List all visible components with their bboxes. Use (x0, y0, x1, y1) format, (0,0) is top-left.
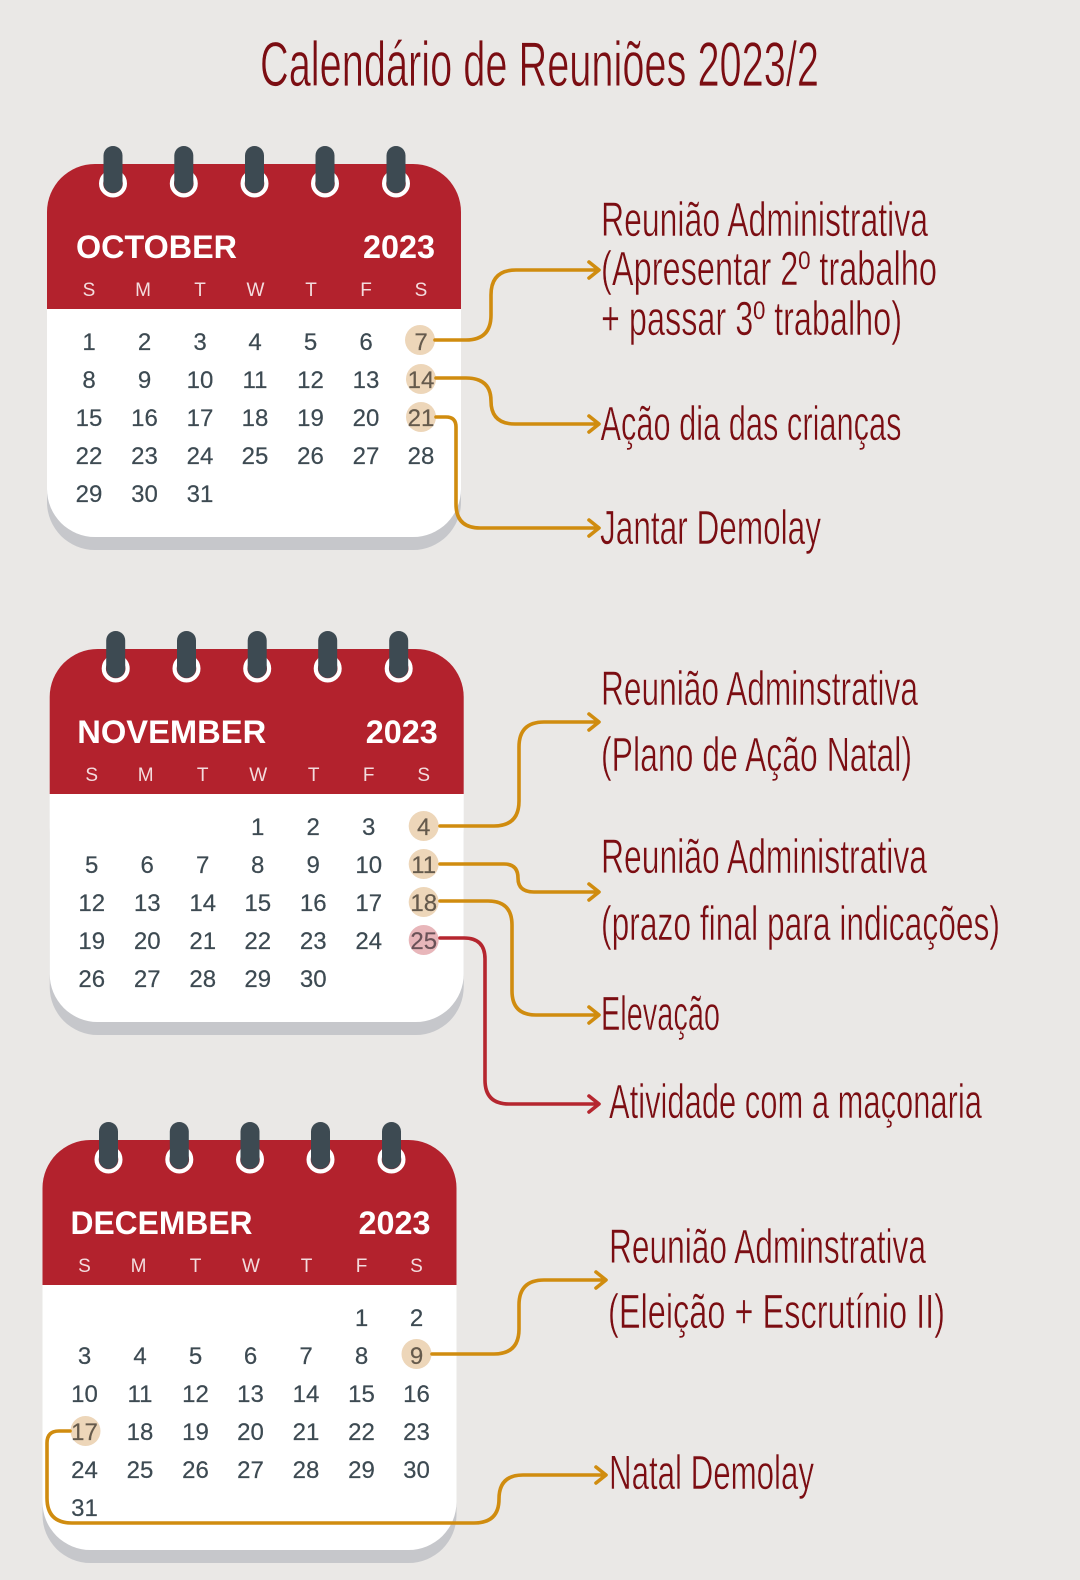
panel: october calendar: 24 (187, 443, 213, 470)
panel: november calendar: 12 (78, 890, 105, 917)
text: november 4 event: (Plano de Ação Natal) (601, 729, 912, 782)
panel: december calendar: 31 (71, 1495, 98, 1522)
panel: december calendar: T (301, 1256, 313, 1277)
text: november 11 event: Reunião Administrativa (601, 831, 927, 884)
panel: december calendar: 11 (128, 1381, 152, 1408)
panel: november calendar: S (85, 765, 98, 786)
panel: december calendar: 4 (133, 1343, 147, 1370)
panel: december calendar: T (190, 1256, 202, 1277)
text: october 7 event: + passar 3º trabalho) (601, 293, 902, 346)
panel: october calendar: 4 (248, 329, 262, 356)
panel: december calendar: 16 (403, 1381, 430, 1408)
panel: october calendar: OCTOBER (76, 229, 237, 265)
arrow: october 14 (436, 378, 599, 432)
panel: december calendar: S (410, 1256, 423, 1277)
panel: november calendar: 2 (307, 814, 320, 841)
panel: october calendar: 29 (76, 481, 102, 508)
panel: december calendar: 5 (189, 1343, 202, 1370)
panel: november calendar: 22 (244, 928, 271, 955)
panel: october calendar: 22 (76, 443, 102, 470)
panel: december calendar: 15 (348, 1381, 375, 1408)
panel: october calendar: 6 (359, 329, 373, 356)
panel: november calendar: 4 (417, 814, 430, 841)
panel: october calendar: 11 (243, 367, 267, 394)
arrow: december 17 (47, 1431, 606, 1523)
text: november 18 event: Elevação (601, 988, 720, 1041)
panel: november calendar: 29 (244, 966, 271, 993)
panel: october calendar: 26 (297, 443, 324, 470)
panel: december calendar: 14 (293, 1381, 319, 1408)
panel: november calendar: T (308, 765, 320, 786)
panel: october calendar: W (247, 280, 265, 301)
panel: october calendar: 3 (193, 329, 207, 356)
panel: november calendar: 26 (78, 966, 105, 993)
panel: october calendar: 27 (353, 443, 379, 470)
panel: december calendar: 27 (237, 1457, 264, 1484)
panel: december calendar: 6 (244, 1343, 257, 1370)
panel: october calendar: 18 (242, 405, 268, 432)
panel: november calendar (50, 631, 464, 1035)
arrow: november 25 (440, 938, 599, 1112)
panel: october calendar: 25 (242, 443, 268, 470)
text: november 4 event: Reunião Adminstrativa (601, 663, 918, 716)
panel: october calendar: 7 (414, 329, 428, 356)
panel: november calendar: 9 (307, 852, 320, 879)
panel: december calendar: 26 (182, 1457, 209, 1484)
panel: november calendar: 2023 (366, 714, 438, 750)
panel: october calendar: 21 (408, 405, 434, 432)
panel: october calendar: 17 (187, 405, 213, 432)
arrow: october 7 (435, 262, 599, 340)
panel: december calendar: 2023 (358, 1205, 430, 1241)
panel: november calendar: 6 (141, 852, 154, 879)
panel: november calendar: F (363, 765, 375, 786)
panel: december calendar: 9 (410, 1343, 423, 1370)
panel: october calendar: 1 (82, 329, 96, 356)
panel: december calendar: 23 (403, 1419, 430, 1446)
panel: october calendar: S (415, 280, 427, 301)
panel: november calendar: 7 (196, 852, 209, 879)
panel: december calendar (42, 1122, 456, 1563)
text: october 14 event: Ação dia das crianças (600, 398, 902, 451)
panel: october calendar: 2 (138, 329, 151, 356)
panel: december calendar: 19 (182, 1419, 209, 1446)
panel: november calendar: 5 (85, 852, 98, 879)
panel: october calendar: 19 (297, 405, 324, 432)
panel: october calendar: 5 (304, 329, 317, 356)
panel: december calendar: 18 (127, 1419, 153, 1446)
panel: december calendar: 2 (410, 1305, 423, 1332)
panel: december calendar: 13 (237, 1381, 264, 1408)
panel: november calendar: 27 (134, 966, 161, 993)
arrow: october 21 (436, 417, 599, 536)
panel: november calendar: S (417, 765, 430, 786)
panel: november calendar: NOVEMBER (77, 714, 266, 750)
panel: october calendar: T (194, 280, 206, 301)
panel: november calendar: 28 (189, 966, 216, 993)
arrow: december 9 (432, 1272, 606, 1354)
panel: november calendar: 1 (251, 814, 264, 841)
panel: october calendar: 20 (353, 405, 379, 432)
panel: november calendar: 20 (134, 928, 161, 955)
panel: november calendar: 23 (300, 928, 327, 955)
panel: october calendar (47, 146, 461, 550)
panel: november calendar: 19 (78, 928, 105, 955)
panel: december calendar: 17 (71, 1419, 98, 1446)
panel: november calendar: 24 (355, 928, 382, 955)
text: december 9 event: Reunião Adminstrativa (609, 1221, 926, 1274)
panel: december calendar: S (78, 1256, 91, 1277)
text: november 11 event (601, 831, 1000, 951)
text: november 4 event (601, 663, 918, 782)
panel: october calendar: 14 (408, 367, 434, 394)
panel: november calendar: 25 (410, 928, 437, 955)
panel: november calendar: 17 (355, 890, 382, 917)
panel: november calendar: 13 (134, 890, 161, 917)
panel: november calendar: 16 (300, 890, 327, 917)
panel: october calendar: 16 (131, 405, 158, 432)
panel: october calendar: 23 (131, 443, 158, 470)
panel: october calendar: 9 (138, 367, 151, 394)
panel: december calendar: 29 (348, 1457, 375, 1484)
panel: november calendar: M (138, 765, 154, 786)
arrow: november 11 (440, 864, 599, 900)
panel: november calendar: T (197, 765, 209, 786)
panel: november calendar: 21 (189, 928, 216, 955)
panel: december calendar: 3 (78, 1343, 91, 1370)
panel: december calendar: 1 (355, 1305, 368, 1332)
panel: october calendar: 31 (187, 481, 213, 508)
panel: december calendar: W (242, 1256, 260, 1277)
panel: december calendar: 28 (293, 1457, 319, 1484)
panel: october calendar: 10 (187, 367, 213, 394)
arrow: november 18 (440, 901, 599, 1023)
panel: november calendar: 30 (300, 966, 327, 993)
text: october 21 event: Jantar Demolay (600, 502, 821, 555)
panel: december calendar: 21 (293, 1419, 319, 1446)
panel: december calendar: 20 (237, 1419, 264, 1446)
panel: november calendar: 3 (362, 814, 375, 841)
panel: december calendar: 30 (403, 1457, 430, 1484)
panel: november calendar: 10 (355, 852, 382, 879)
panel: november calendar: W (249, 765, 267, 786)
panel: november calendar: 18 (410, 890, 437, 917)
panel: october calendar: 8 (82, 367, 96, 394)
arrow: november 4 (440, 714, 599, 826)
panel: december calendar: DECEMBER (70, 1205, 252, 1241)
panel: october calendar: S (83, 280, 95, 301)
panel: december calendar: F (356, 1256, 367, 1277)
panel: december calendar: M (131, 1256, 146, 1277)
panel: october calendar: 12 (297, 367, 324, 394)
panel: november calendar: 8 (251, 852, 264, 879)
panel: december calendar: 10 (71, 1381, 98, 1408)
panel: november calendar: 14 (189, 890, 216, 917)
panel: october calendar: T (305, 280, 317, 301)
text: december 9 event (608, 1221, 945, 1339)
panel: december calendar: 22 (348, 1419, 375, 1446)
panel: november calendar: 15 (244, 890, 271, 917)
panel: october calendar: 28 (408, 443, 434, 470)
panel: december calendar: 25 (127, 1457, 153, 1484)
panel: december calendar: 24 (71, 1457, 98, 1484)
text: october 7 event: Reunião Administrativa (601, 194, 928, 247)
panel: october calendar: 13 (353, 367, 379, 394)
text: october 7 event (601, 194, 937, 346)
text: december 17 event: Natal Demolay (609, 1447, 814, 1500)
panel: october calendar: 2023 (363, 229, 435, 265)
panel: october calendar: 30 (131, 481, 158, 508)
panel: december calendar: 12 (182, 1381, 209, 1408)
panel: november calendar: 11 (411, 852, 436, 879)
panel: december calendar: 8 (355, 1343, 368, 1370)
panel: october calendar: 15 (76, 405, 102, 432)
panel: october calendar: F (360, 280, 372, 301)
panel: october calendar: M (135, 280, 151, 301)
panel: december calendar: 7 (299, 1343, 313, 1370)
